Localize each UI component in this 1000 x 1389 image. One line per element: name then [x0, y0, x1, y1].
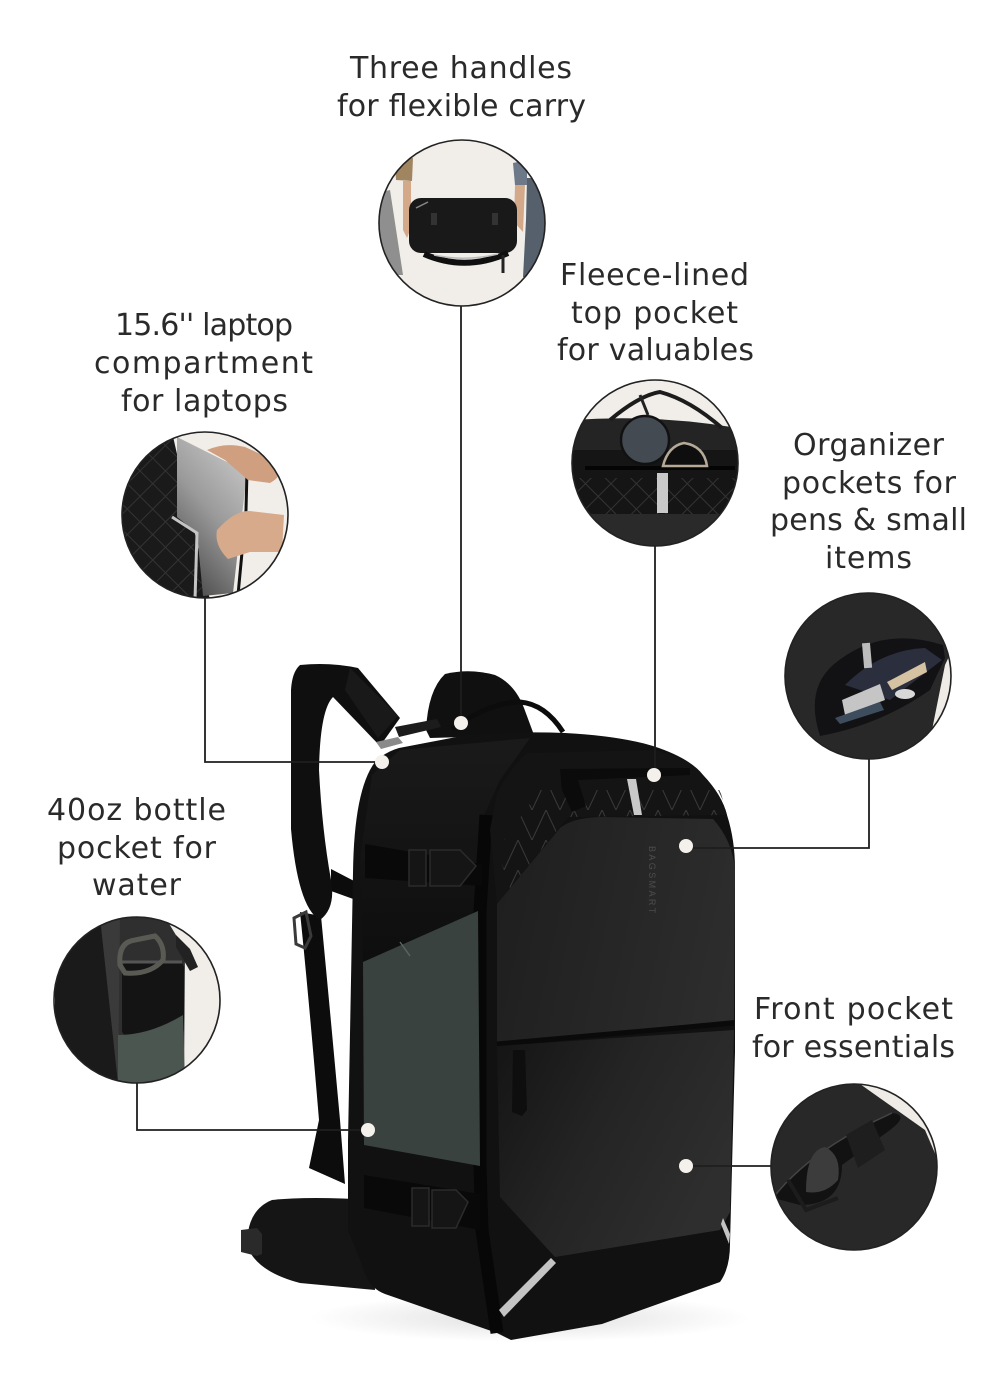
text: bottle pocket [47, 793, 226, 903]
circle: fleece-lined pocket photo [572, 380, 738, 546]
text: organizer pockets: Organizer [793, 428, 945, 463]
text: front pocket: for essentials [752, 1030, 955, 1065]
right shoulder strap [426, 671, 534, 738]
lower front panel [497, 1030, 734, 1257]
text: bottle pocket: pocket for [57, 831, 217, 866]
text: bottle pocket: 40oz bottle [47, 793, 226, 828]
text: fleece-lined pocket [557, 258, 754, 368]
text: three handles: Three handles [349, 51, 572, 86]
circle: laptop compartment photo [122, 432, 288, 600]
circle: front pocket photo [771, 1084, 940, 1251]
text: organizer pockets: pockets for [782, 466, 957, 501]
text: fleece-lined pocket: for valuables [557, 333, 754, 368]
lower side buckle [364, 1175, 480, 1230]
left shoulder strap [291, 664, 400, 920]
net top flap [490, 750, 727, 904]
text: fleece-lined pocket: top pocket [571, 296, 738, 331]
side panel [360, 738, 530, 962]
text: three handles [337, 51, 586, 124]
lower strap [300, 912, 345, 1184]
connector lines [137, 306, 869, 1166]
bag body [348, 732, 735, 1340]
green mesh pocket [363, 911, 480, 1166]
circle: bottle pocket photo [54, 917, 220, 1083]
text: three handles: for flexible carry [337, 89, 586, 124]
upper front panel [497, 817, 735, 1043]
top zipper pocket [560, 768, 690, 812]
text: fleece-lined pocket: Fleece-lined [560, 258, 749, 293]
backpack product illustration [241, 664, 750, 1342]
text: organizer pockets [770, 428, 967, 576]
text: laptop compartment: compartment [94, 346, 313, 381]
strap buckle and reflective tag [395, 719, 441, 737]
circle: organizer pockets photo [785, 593, 952, 760]
top handle [452, 702, 563, 732]
zipper pull [512, 1050, 527, 1116]
hotspot dots [361, 716, 693, 1173]
text: bottle pocket: water [92, 868, 182, 903]
brand label: BAGSMART [647, 846, 657, 916]
text: organizer pockets: items [825, 541, 912, 576]
front pocket zipper [497, 1023, 734, 1044]
circle: three handles photo [378, 140, 548, 306]
text: laptop compartment [94, 308, 313, 419]
text: front pocket: Front pocket [754, 992, 953, 1027]
corner reflective strips [499, 1218, 730, 1317]
text: laptop compartment: for laptops [121, 384, 288, 419]
text: front pocket [752, 992, 955, 1065]
zipper edge [480, 815, 497, 1333]
hip belt [248, 1198, 375, 1290]
text: organizer pockets: pens & small [770, 503, 967, 538]
upper side buckle [365, 844, 482, 886]
text: laptop compartment: 15.6'' laptop [115, 308, 293, 343]
reflective strip [627, 779, 642, 815]
